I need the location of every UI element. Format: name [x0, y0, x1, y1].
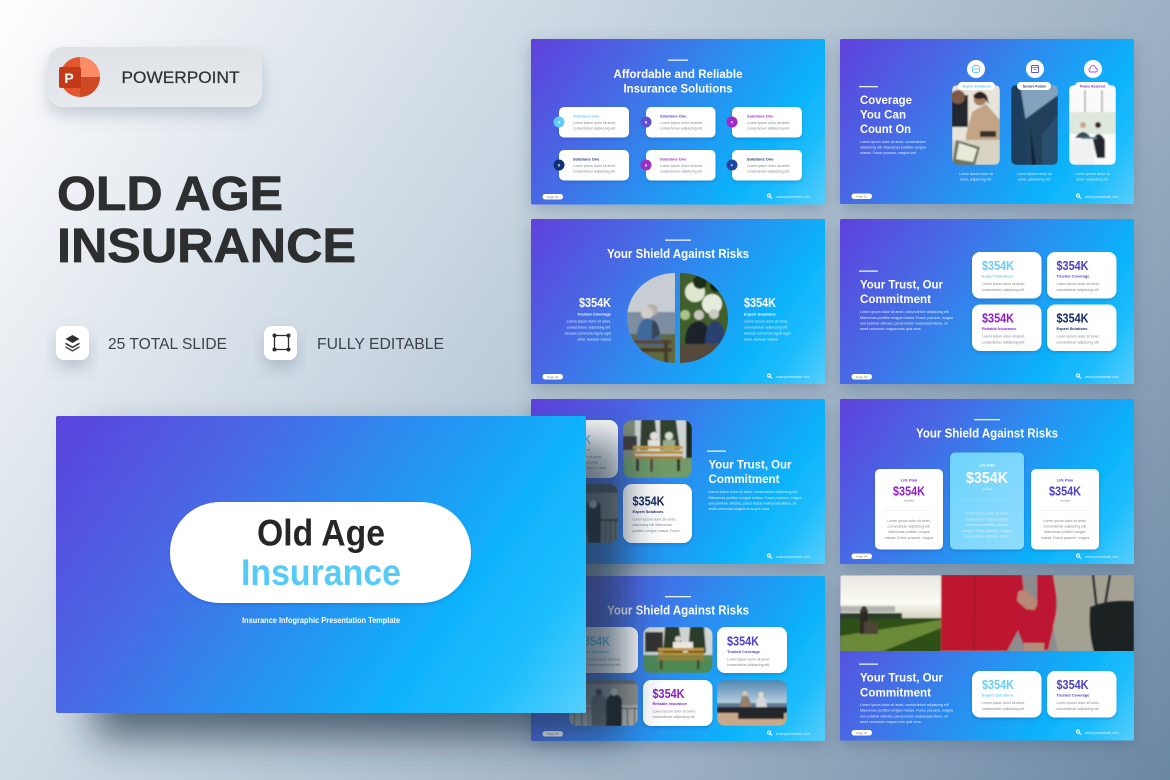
card D: Solutions One	[573, 156, 600, 162]
stat: trusted coverage: Aenean commodo ligula eget	[564, 332, 611, 336]
card: expert solutions navy: Lorem ipsum dolor sit amet,	[1056, 334, 1100, 338]
footer	[768, 554, 810, 559]
footer	[542, 731, 810, 736]
card C: C	[731, 120, 734, 124]
icon: powerpoint logo	[59, 57, 100, 97]
card partly hidden: $354K	[578, 634, 610, 648]
plan card right: massa. Fusce posuere, magna	[1041, 536, 1089, 540]
card D	[554, 150, 629, 180]
card: trusted coverage	[717, 627, 787, 673]
card: reliable insurance: Reliable Insurance	[652, 701, 688, 706]
cover title pill: Insurance	[241, 552, 401, 593]
card partly hidden by cover slide: Expert Solutions	[559, 447, 590, 452]
photo captions: amet, adipiscing elit.	[1076, 178, 1109, 182]
photo: glass towers: Secure Future	[1023, 84, 1046, 88]
plan card centre highlighted: massa. Fusce posuere, magna	[962, 529, 1012, 533]
slide 8: photo banner and trust cards: Commitment	[860, 686, 931, 700]
photo banner	[840, 575, 1134, 652]
stat: expert solutions: Aenean commodo ligula eget	[744, 332, 791, 336]
card D: D	[558, 164, 561, 168]
stat: expert solutions: consectetuer adipiscing elit.	[744, 326, 788, 330]
slide 2: coverage you can count on	[840, 39, 1134, 204]
cover subtitle: Insurance Infographic Presentation Template	[242, 616, 401, 625]
card: expert solutions	[623, 484, 692, 543]
card: expert solutions navy: $354K	[1056, 312, 1088, 326]
slide 5: trust with photos and stat cards: Lorem ipsum dolor sit amet, consectetuer adipiscing elit.	[708, 490, 798, 494]
slide 5: trust with photos and stat cards: Maecenas porttitor congue massa. Fusce posuere, magna	[708, 496, 801, 500]
photo: business meeting	[951, 82, 1000, 165]
feature: 25 total slide: 25 TOTAL SLIDE	[108, 336, 227, 353]
card: trusted coverage: Lorem ipsum dolor sit amet,	[1056, 701, 1100, 705]
card: trusted coverage: Trusted Coverage	[1056, 274, 1090, 278]
stat: trusted coverage: $354K	[579, 296, 611, 310]
footer: Page 33	[856, 375, 868, 379]
footer: www.yourwebsite.com	[1085, 195, 1119, 199]
card: trusted coverage: consectetuer adipiscing elit.	[1056, 707, 1100, 711]
card: expert solutions: consectetuer adipiscing elit.	[982, 707, 1025, 711]
slide 2: coverage you can count on: adipiscing elit. Maecenas porttitor congue	[860, 146, 926, 150]
slide 2: coverage you can count on: Lorem ipsum dolor sit amet, consectetuer	[860, 140, 927, 144]
footer	[852, 194, 1119, 199]
card partly hidden by cover slide: porttitor congue massa. Fusce	[559, 466, 606, 470]
plan card right: $354K	[1049, 484, 1081, 498]
stat: expert solutions: Expert Solutions	[744, 312, 777, 316]
footer: www.yourwebsite.com	[1085, 555, 1119, 559]
stat: trusted coverage	[564, 296, 612, 342]
card A	[554, 107, 629, 138]
slide 1: affordable solutions: Affordable and Reliable	[614, 67, 743, 81]
plan card left: Maecenas porttitor congue	[888, 530, 930, 534]
footer: Page 30	[547, 195, 559, 199]
photo: office conversation: Peace Assured	[1080, 84, 1105, 88]
card D: Lorem ipsum dolor sit amet,	[573, 164, 616, 168]
main title	[57, 168, 356, 273]
footer: www.yourwebsite.com	[776, 375, 810, 379]
slide 5: trust with photos and stat cards	[531, 399, 825, 564]
slide 4: your trust, our commitment: Your Trust, Our	[860, 278, 943, 292]
card F: Lorem ipsum dolor sit amet,	[747, 164, 790, 168]
card: expert solutions navy: consectetuer adipiscing elit.	[1056, 340, 1100, 344]
plan card right: Life Plan	[1057, 478, 1074, 483]
plan card left: massa. Fusce posuere, magna	[885, 536, 933, 540]
slide 6: pricing plans: Your Shield Against Risks	[916, 426, 1058, 440]
slide 5: trust with photos and stat cards: Your Trust, Our	[708, 458, 792, 472]
cover slide	[56, 416, 586, 713]
footer	[852, 554, 1119, 559]
footer	[542, 374, 810, 380]
card E: E	[645, 164, 648, 168]
card: reliable insurance: Lorem ipsum dolor sit amet,	[982, 334, 1025, 338]
slide 8: photo banner and trust cards: amet commodo magna eros quis urna.	[860, 720, 922, 724]
footer: Page 31	[856, 194, 868, 198]
card: trusted coverage: consectetuer adipiscing elit.	[1056, 288, 1100, 292]
footer: Page 35	[547, 732, 559, 736]
plan card right: Lorem ipsum dolor sit amet,	[1043, 519, 1087, 523]
card partly hidden by cover slide: $354K	[559, 433, 591, 447]
card: expert solutions: Lorem ipsum dolor sit amet,	[982, 701, 1025, 705]
card: trusted coverage: $354K	[727, 634, 759, 648]
icon: transform frame	[272, 334, 290, 352]
photo captions: Lorem ipsum dolor sit	[1075, 172, 1110, 176]
slide 2: coverage you can count on: You Can	[860, 108, 906, 122]
stat: expert solutions	[744, 296, 791, 342]
card: reliable insurance: consectetuer adipiscing elit.	[982, 340, 1025, 344]
footer	[542, 194, 810, 200]
card: expert solutions	[972, 671, 1042, 718]
card: reliable insurance: Lorem ipsum dolor sit amet,	[652, 710, 696, 714]
card A: A	[558, 120, 561, 124]
card B	[640, 107, 716, 138]
slide 4: your trust, our commitment: amet commodo magna eros quis urna.	[860, 327, 922, 331]
card: reliable insurance: $354K	[652, 687, 684, 701]
card partly hidden: consectetuer adipiscing elit.	[578, 663, 621, 667]
card D: consectetuer adipiscing elit.	[573, 170, 616, 174]
slide 1: affordable solutions: Insurance Solutions	[624, 82, 733, 96]
slide 5: trust with photos and stat cards: amet commodo magna eros quis urna.	[708, 507, 770, 511]
card: expert solutions navy	[1047, 304, 1116, 351]
plan card left: Life Plan	[901, 478, 918, 483]
card: reliable insurance	[972, 304, 1042, 351]
photo: couple on bench, right half	[680, 273, 728, 363]
plan card centre highlighted	[950, 452, 1024, 550]
slide 4: your trust, our commitment: sed pulvinar ultricies, purus lectus malesuada libero, sit	[860, 322, 948, 326]
slide 2: coverage you can count on: massa. Fusce posuere, magna sed	[860, 151, 916, 155]
plan card centre highlighted: Life Plan	[979, 462, 996, 468]
photo captions	[959, 172, 1110, 182]
card E: Lorem ipsum dolor sit amet,	[660, 164, 703, 168]
stat: trusted coverage: Trusted Coverage	[577, 312, 612, 316]
footer: www.yourwebsite.com	[1085, 731, 1119, 735]
card: trusted coverage: $354K	[1056, 678, 1088, 692]
card: trusted coverage: consectetuer adipiscing elit.	[727, 663, 770, 667]
card C: consectetuer adipiscing elit.	[747, 126, 790, 130]
card: expert solutions: Lorem ipsum dolor sit amet,	[632, 518, 676, 522]
card F: F	[731, 164, 734, 168]
card C: Lorem ipsum dolor sit amet,	[747, 121, 790, 125]
photo: bench in park	[643, 627, 713, 673]
stat: expert solutions: Lorem ipsum dolor sit amet,	[744, 320, 788, 324]
stat: trusted coverage: dolor. Aenean massa	[577, 338, 611, 342]
slide 2: coverage you can count on: Count On	[860, 122, 911, 136]
stat: trusted coverage: Lorem ipsum dolor sit amet,	[567, 320, 611, 324]
photo captions: amet, adipiscing elit.	[960, 178, 992, 182]
card: expert solutions: $354K	[982, 259, 1014, 273]
photo captions: amet, adipiscing elit.	[1018, 178, 1051, 182]
card E: Solutions One	[660, 156, 687, 162]
slide 1: affordable solutions	[531, 39, 825, 204]
icon circles	[967, 60, 1102, 78]
slide 3: your shield against risks, split circle	[531, 219, 825, 384]
card B: Solutions One	[660, 114, 687, 118]
plan card centre highlighted: monthly	[982, 487, 993, 491]
slide 8: photo banner and trust cards: Lorem ipsum dolor sit amet, consectetuer adipiscing elit.	[860, 703, 950, 707]
icon: layers	[66, 335, 80, 352]
plan card centre highlighted: consectetuer adipiscing elit.	[965, 518, 1009, 522]
slide 4: your trust, our commitment: Lorem ipsum dolor sit amet, consectetuer adipiscing elit.	[860, 310, 950, 314]
card E: consectetuer adipiscing elit.	[660, 170, 703, 174]
card: expert solutions: consectetuer adipiscing elit.	[982, 288, 1025, 292]
slide 8: photo banner and trust cards: Maecenas porttitor congue massa. Fusce posuere, magna	[860, 708, 953, 712]
card: reliable insurance: consectetuer adipiscing elit.	[652, 715, 696, 719]
card: trusted coverage: Lorem ipsum dolor sit amet,	[727, 658, 770, 662]
plan card left	[875, 469, 943, 550]
slide 8: photo banner and trust cards	[840, 575, 1134, 740]
icon: powerpoint logo: P	[64, 70, 74, 86]
card: expert solutions: Expert Solutions	[982, 274, 1013, 278]
feature: fully editable	[264, 326, 444, 360]
plan card right	[1031, 469, 1099, 550]
photo: couple at railing	[569, 680, 638, 726]
plan card left: $354K	[893, 484, 925, 498]
card: expert solutions navy: Expert Solutions	[1056, 326, 1087, 331]
footer	[852, 730, 1119, 736]
footer: www.yourwebsite.com	[1085, 375, 1119, 379]
card C: Solutions One	[747, 114, 774, 118]
card: reliable insurance	[643, 680, 712, 726]
card partly hidden	[569, 627, 638, 673]
card B: B	[645, 120, 648, 124]
footer: Page 34	[856, 554, 868, 558]
main title: INSURANCE	[57, 220, 356, 273]
footer: www.yourwebsite.com	[776, 195, 810, 199]
card: trusted coverage	[1047, 252, 1116, 298]
card: reliable insurance: $354K	[982, 312, 1014, 326]
card F: Solutions One	[747, 156, 774, 162]
photo captions: Lorem ipsum dolor sit	[959, 172, 993, 176]
slide 4: your trust, our commitment: Maecenas porttitor congue massa. Fusce posuere, magna	[860, 316, 953, 320]
card partly hidden by cover slide: Lorem ipsum dolor sit amet,	[559, 455, 602, 459]
card: expert solutions: $354K	[982, 678, 1014, 692]
footer: www.yourwebsite.com	[776, 732, 810, 736]
plan card left: Lorem ipsum dolor sit amet,	[887, 519, 931, 523]
card partly hidden by cover slide: adipiscing elit. Maecenas	[559, 460, 598, 464]
card partly hidden by cover slide	[549, 420, 618, 478]
card: expert solutions: $354K	[632, 494, 664, 508]
feature: fully editable: FULLY EDITABLE	[317, 336, 444, 353]
slide 2: coverage you can count on: Coverage	[860, 93, 912, 107]
slide 7: shield with photo and card grid	[531, 576, 825, 741]
card partly hidden: Lorem ipsum dolor sit amet,	[578, 658, 621, 662]
main title: OLD AGE	[57, 168, 283, 221]
footer: Page 36	[856, 731, 868, 735]
plan card left: monthly	[904, 498, 915, 502]
card A: consectetuer adipiscing elit.	[573, 126, 616, 130]
card: expert solutions	[972, 252, 1042, 298]
slide 3: your shield against risks, split circle: Your Shield Against Risks	[607, 247, 749, 261]
plan card centre highlighted: Maecenas porttitor congue	[966, 523, 1008, 527]
card C	[726, 107, 802, 138]
cover title pill: Old Age	[257, 512, 385, 554]
footer: www.yourwebsite.com	[776, 555, 810, 559]
card: trusted coverage: $354K	[1056, 259, 1088, 273]
footer	[852, 374, 1119, 380]
card: expert solutions: Lorem ipsum dolor sit amet,	[982, 282, 1025, 286]
card: expert solutions: Expert Solutions	[982, 692, 1013, 698]
card A: Lorem ipsum dolor sit amet,	[573, 121, 616, 125]
card partly hidden: Expert Solutions	[578, 649, 609, 654]
card: reliable insurance: Reliable Insurance	[982, 326, 1017, 331]
card B: Lorem ipsum dolor sit amet,	[660, 121, 703, 125]
stat: expert solutions: dolor. Aenean massa	[744, 338, 778, 342]
photo: bench from behind	[623, 420, 692, 478]
card F: consectetuer adipiscing elit.	[747, 170, 790, 174]
powerpoint badge: POWERPOINT	[122, 68, 240, 87]
slide 7: shield with photo and card grid: Your Shield Against Risks	[607, 604, 749, 618]
slide 4: your trust, our commitment: Commitment	[860, 292, 931, 306]
card: expert solutions: porttitor congue massa. Fusce	[632, 529, 680, 533]
plan card right: monthly	[1060, 498, 1071, 502]
card: trusted coverage: Trusted Coverage	[1056, 692, 1090, 698]
card: expert solutions: adipiscing elit. Maecenas	[632, 523, 672, 527]
photo: couple on seaside bench	[717, 680, 787, 726]
slide 8: photo banner and trust cards: Your Trust, Our	[860, 670, 943, 684]
card: trusted coverage: Lorem ipsum dolor sit amet,	[1056, 282, 1100, 286]
card A: Solutions One	[573, 114, 600, 118]
card: trusted coverage	[1047, 671, 1116, 718]
card: trusted coverage: Trusted Coverage	[727, 649, 761, 654]
photo: couple on bench, left half	[627, 273, 675, 363]
cover title pill	[170, 502, 471, 603]
card: expert solutions: Expert Solutions	[632, 509, 663, 514]
card E	[640, 150, 716, 180]
slide 4: your trust, our commitment	[840, 219, 1134, 384]
feature: 25 total slide	[56, 326, 227, 360]
plan card right: consectetuer adipiscing elit.	[1044, 524, 1087, 528]
card F	[726, 150, 802, 180]
plan card right: Maecenas porttitor congue	[1044, 530, 1086, 534]
stat: trusted coverage: consectetuer adipiscing elit.	[567, 326, 611, 330]
slide 6: pricing plans	[840, 399, 1134, 564]
slide 5: trust with photos and stat cards: Commitment	[708, 472, 780, 486]
slide 8: photo banner and trust cards: sed pulvinar ultricies, purus lectus malesuada libero, sit	[860, 714, 948, 718]
photo captions: Lorem ipsum dolor sit	[1017, 172, 1052, 176]
stat: expert solutions: $354K	[744, 296, 776, 310]
photo: glass towers	[1011, 82, 1058, 165]
photo: man at railing	[586, 484, 618, 543]
slide 5: trust with photos and stat cards: sed pulvinar ultricies, purus lectus malesuada libero, sit	[708, 502, 796, 506]
plan card centre highlighted: sed pulvinar ultricies. Purus	[965, 534, 1009, 538]
powerpoint badge	[48, 47, 262, 107]
card B: consectetuer adipiscing elit.	[660, 126, 703, 130]
photo: office conversation	[1069, 82, 1116, 165]
plan card left: consectetuer adipiscing elit.	[888, 524, 931, 528]
photo: business meeting: Expert Solutions	[963, 84, 990, 88]
plan card centre highlighted: Lorem ipsum dolor sit amet,	[965, 512, 1009, 516]
plan card centre highlighted: $354K	[966, 470, 1009, 487]
footer: Page 32	[547, 375, 559, 379]
